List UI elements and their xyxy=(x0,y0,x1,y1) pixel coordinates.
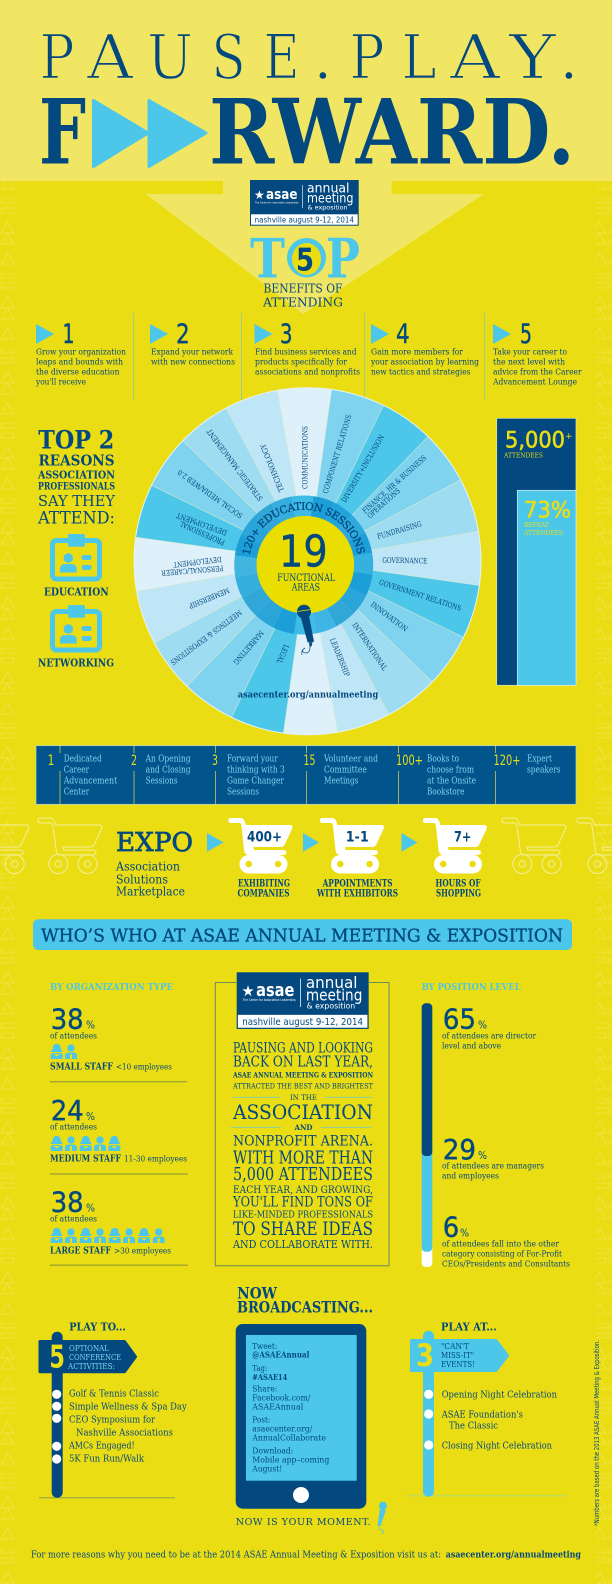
phone text: Tag: xyxy=(252,1364,267,1374)
fact 5: Books to xyxy=(427,755,459,765)
wheel inner ring xyxy=(234,495,373,635)
panel: attendees bars xyxy=(497,418,576,685)
icon: education badge xyxy=(52,534,100,579)
panel: now broadcasting: BROADCASTING... xyxy=(237,1298,373,1317)
title: pause play: . xyxy=(559,20,579,94)
icon: cart 400+: 400+ xyxy=(247,830,282,846)
events list xyxy=(441,1390,557,1452)
wheel labels: LEGAL xyxy=(275,643,291,665)
narrative text: WITH MORE THAN xyxy=(233,1149,373,1169)
banner: who's who xyxy=(33,919,572,950)
stat: large staff: >30 employees xyxy=(114,1246,171,1256)
bar: position levels xyxy=(422,1003,432,1267)
stat: small staff: % xyxy=(86,1018,95,1031)
narrative text xyxy=(232,1041,374,1251)
panel: expo heading: Association xyxy=(115,860,180,874)
stat: 29% xyxy=(442,1133,544,1181)
panel: expo heading: Solutions xyxy=(116,873,168,887)
wheel labels: PERSONAL/CAREER xyxy=(161,564,224,578)
fact 3: Forward your xyxy=(227,755,278,765)
panel: benefit 5 xyxy=(492,319,582,387)
stat: medium staff: 24 xyxy=(51,1094,84,1127)
panel: play to: PLAY TO... xyxy=(69,1320,126,1334)
wheel labels: DEVELOPMENT xyxy=(175,511,228,537)
fact 6: speakers xyxy=(527,766,561,776)
stat: 6%: of attendees fall into the other xyxy=(442,1240,560,1250)
footnote: *Numbers are based on the 2013 ASAE Annual Meeting & Exposition. xyxy=(593,1340,601,1526)
phone text: AnnualCollaborate xyxy=(251,1434,326,1444)
fact 2 xyxy=(131,753,191,787)
stat: medium staff: 11-30 employees xyxy=(124,1155,187,1165)
bullets xyxy=(52,1390,61,1464)
panel: attendees bars: + xyxy=(565,432,573,442)
subheading: benefits of attending: BENEFITS OF xyxy=(264,282,342,296)
stat: 29%: and employees xyxy=(442,1171,499,1181)
stat: small staff xyxy=(50,1002,172,1073)
panel: top 2 reasons xyxy=(37,425,116,670)
logo: asae annual meeting: meeting xyxy=(307,192,354,207)
fact 2: An Opening xyxy=(145,755,191,765)
panel: by organization type xyxy=(50,982,188,1266)
narrative text: EACH YEAR, AND GROWING, xyxy=(233,1185,373,1196)
panel: play to: ACTIVITIES: xyxy=(67,1362,115,1371)
panel: benefit 4 xyxy=(370,319,479,377)
panel: top 2 reasons: TOP 2 xyxy=(38,425,114,454)
stat: 65%: % xyxy=(478,1018,487,1031)
panel: expo heading xyxy=(115,828,193,899)
fact 6: 120+ xyxy=(494,753,520,769)
stat: 29%: % xyxy=(478,1149,487,1162)
panel: by position level xyxy=(422,982,570,1270)
stat: large staff: LARGE STAFF xyxy=(50,1246,112,1256)
center circle xyxy=(256,516,354,614)
title: forward xyxy=(39,80,575,186)
panel: attendees bars: ATTENDEES xyxy=(523,529,563,537)
icon: fast forward arrows xyxy=(94,100,206,166)
stat: 6%: % xyxy=(460,1227,469,1240)
stat: 65% xyxy=(442,1002,537,1051)
arrow xyxy=(303,833,319,852)
panel: attendees bars: 5,000 xyxy=(505,429,565,454)
phone xyxy=(236,1324,366,1509)
panel: facts bar xyxy=(36,746,576,804)
logo: asae annual meeting: meeting xyxy=(306,985,362,1004)
panel: top 2 reasons: SAY THEY xyxy=(38,492,116,510)
panel: play at: 3 xyxy=(416,1338,434,1374)
down arrow xyxy=(146,181,484,314)
wheel labels: GOVERNANCE xyxy=(382,556,427,565)
fact 1: 1 xyxy=(48,753,54,769)
title: pause play: P xyxy=(350,20,384,94)
icon: microphone xyxy=(378,1502,387,1534)
title: pause play xyxy=(40,20,579,94)
wheel labels: FUNDRAISING xyxy=(376,519,423,541)
icon: cart 400+ xyxy=(228,818,292,874)
panel: benefit 1: 1 xyxy=(62,319,74,350)
logo: asae annual meeting: & exposition xyxy=(307,1002,355,1011)
panel: play to: CONFERENCE xyxy=(69,1353,121,1362)
title: pause play: A xyxy=(449,20,501,94)
fact 2: Sessions xyxy=(146,777,178,787)
phone text: Mobile app–coming xyxy=(252,1456,330,1466)
wheel labels: DEVELOPMENT xyxy=(173,555,222,569)
fact 6 xyxy=(494,753,561,776)
stat: 65%: 65 xyxy=(443,1002,476,1035)
panel: now broadcasting xyxy=(236,1283,387,1534)
activities list: 5K Fun Run/Walk xyxy=(69,1454,144,1465)
title: pause play: S xyxy=(212,20,246,94)
phone text: ASAEAnnual xyxy=(251,1403,304,1413)
banner: who's who: WHO’S WHO AT ASAE ANNUAL MEETING & EXPOSITION xyxy=(41,926,563,947)
stat: small staff: <10 employees xyxy=(116,1063,172,1073)
icon: cart 7+ xyxy=(423,818,487,874)
panel: play at: PLAY AT... xyxy=(441,1320,497,1334)
cart caption: HOURS OF xyxy=(436,878,481,890)
wheel labels: OPERATIONS xyxy=(365,486,402,520)
chart: functional areas wheel xyxy=(134,387,482,736)
cart caption: SHOPPING xyxy=(436,888,481,900)
wheel labels: STRATEGIC MANAGEMENT xyxy=(205,427,265,503)
phone text: asaecenter.org/ xyxy=(252,1425,312,1435)
ring label: 120+ EDUCATION SESSIONS xyxy=(242,502,365,554)
title: pause play: U xyxy=(147,20,193,94)
signpost xyxy=(423,1331,434,1497)
events list: The Classic xyxy=(449,1420,498,1431)
activities list: Golf & Tennis Classic xyxy=(69,1389,159,1400)
panel: benefit 3: products specifically for xyxy=(255,357,348,367)
wheel labels: MEETINGS & EXPOSITIONS xyxy=(169,608,244,667)
panel: benefit 5: Take your career to xyxy=(493,347,567,357)
panel: top 2 reasons: ASSOCIATION xyxy=(37,468,115,481)
panel: top 2 reasons: EDUCATION xyxy=(44,586,109,599)
narrative text: TO SHARE IDEAS xyxy=(233,1219,373,1240)
panel: benefit 5: Advancement Lounge xyxy=(492,377,577,387)
phone text: Download: xyxy=(252,1447,293,1457)
activities list: Simple Wellness & Spa Day xyxy=(69,1402,187,1413)
panel: benefit 2: 2 xyxy=(176,319,190,350)
events list: ASAE Foundation's xyxy=(441,1410,523,1421)
panel: benefit 5: advice from the Career xyxy=(493,367,582,377)
phone text: Share: xyxy=(252,1385,277,1395)
title: pause play: E xyxy=(264,20,300,94)
heading: BY POSITION LEVEL xyxy=(422,982,521,993)
fact 3: Sessions xyxy=(227,788,259,798)
cart caption: WITH EXHIBITORS xyxy=(316,888,398,900)
fact 1: Advancement xyxy=(63,777,118,787)
events list: Opening Night Celebration xyxy=(442,1390,557,1401)
panel: benefit 3 xyxy=(254,319,360,377)
title: pause play: A xyxy=(86,20,134,94)
logo: asae annual meeting: asae xyxy=(256,981,294,1001)
panel: benefit 4: Gain more members for xyxy=(371,347,464,357)
cart caption: COMPANIES xyxy=(238,888,290,900)
panel: play to: OPTIONAL xyxy=(69,1344,110,1353)
logo: asae annual meeting: asae xyxy=(266,187,298,203)
panel: benefit 2: Expand your network xyxy=(151,347,234,357)
logo: asae annual meeting: & exposition xyxy=(308,203,348,211)
stat: medium staff: MEDIUM STAFF xyxy=(50,1155,122,1165)
panel: benefit 2 xyxy=(150,319,235,367)
narrative text: ASSOCIATION xyxy=(232,1100,373,1124)
panel: play at xyxy=(407,1320,567,1497)
fact 5 xyxy=(396,753,476,798)
panel: expo heading: EXPO xyxy=(116,828,193,858)
phone text: Facebook.com/ xyxy=(252,1394,310,1404)
panel: benefit 1: the diverse education xyxy=(36,367,120,377)
wheel labels: COMMUNICATIONS xyxy=(301,426,310,489)
events list: Closing Night Celebration xyxy=(442,1441,552,1452)
fact 4: 15 xyxy=(304,753,316,769)
subheading: benefits of attending: ATTENDING xyxy=(262,296,343,310)
arrow xyxy=(402,833,418,852)
fact 6: Expert xyxy=(527,755,552,765)
logo: asae annual meeting: annual xyxy=(307,182,350,197)
icon: cart 1-1: 1-1 xyxy=(346,830,369,846)
icon: networking badge xyxy=(52,605,100,650)
logo: asae annual meeting xyxy=(237,972,369,1029)
heading: top 5: T xyxy=(250,227,285,291)
stat: large staff xyxy=(50,1186,171,1256)
panel: attendees bars: ATTENDEES xyxy=(503,452,543,460)
narrative text: NONPROFIT ARENA. xyxy=(233,1134,373,1150)
wheel labels: PROFESSIONAL xyxy=(178,519,226,547)
phone text: August! xyxy=(251,1465,282,1475)
cart caption xyxy=(316,878,398,900)
wheel labels: SOCIAL MEDIA/WEB 2.0 xyxy=(176,468,244,520)
narrative text: ASAE ANNUAL MEETING & EXPOSITION xyxy=(232,1071,374,1080)
stat: 6% xyxy=(442,1211,570,1270)
logo: asae annual meeting: annual xyxy=(306,973,357,992)
narrative text: AND xyxy=(294,1123,313,1132)
activities list xyxy=(68,1389,187,1465)
logo: asae annual meeting: ★ xyxy=(254,188,265,202)
panel: attendees bars: 73% xyxy=(524,499,571,524)
panel: play to: 5 xyxy=(49,1339,65,1375)
phone text: @ASAEAnnual xyxy=(252,1351,310,1361)
cart caption: APPOINTMENTS xyxy=(322,878,393,890)
narrative text: AND COLLABORATE WITH. xyxy=(232,1237,373,1251)
footer: For more reasons why you need to be at the 2014 ASAE Annual Meeting & Exposition visit us at: xyxy=(31,1550,441,1561)
stat: medium staff: % xyxy=(86,1110,95,1123)
fact 2: and Closing xyxy=(146,766,191,776)
wheel labels xyxy=(161,414,462,678)
fact 5: Bookstore xyxy=(427,788,464,798)
cart caption xyxy=(436,878,481,900)
phone text: Post: xyxy=(252,1416,270,1426)
fact 5: 100+ xyxy=(396,753,423,769)
fact 5: choose from xyxy=(427,766,475,776)
wheel labels: INNOVATION xyxy=(369,600,410,634)
fact 3: 3 xyxy=(212,753,218,769)
center number: 19 xyxy=(279,527,328,578)
panel: benefit 1: Grow your organization xyxy=(36,347,126,357)
wheel labels: LEADERSHIP xyxy=(328,637,352,678)
panel: play at: "CAN'T xyxy=(441,1342,470,1351)
heading: top 5: 5 xyxy=(296,243,314,279)
wheel url: asaecenter.org/annualmeeting xyxy=(238,690,379,701)
activities list: CEO Symposium for xyxy=(69,1415,155,1426)
fact 1: Career xyxy=(64,766,90,776)
logo: asae annual meeting: nashville august 9-12, 2014 xyxy=(242,1017,363,1028)
cart caption xyxy=(238,878,290,900)
stat: 29%: 29 xyxy=(443,1133,476,1166)
wheel labels: TECHNOLOGY xyxy=(258,442,286,493)
panel: top 2 reasons: PROFESSIONALS xyxy=(38,482,115,493)
stat: large staff: 38 xyxy=(51,1186,84,1219)
fact 3 xyxy=(212,753,285,798)
panel: benefit 3: 3 xyxy=(280,319,292,350)
fact 3: Game Changer xyxy=(227,777,285,787)
logo: asae annual meeting: ★ xyxy=(242,983,255,1000)
panel: benefit 4: 4 xyxy=(396,319,410,350)
center caption: FUNCTIONAL xyxy=(277,573,335,584)
cart caption: EXHIBITING xyxy=(238,878,290,890)
fact 1: Dedicated xyxy=(64,755,102,765)
stat: 65%: of attendees are director xyxy=(442,1031,537,1041)
icon: cart 1-1 xyxy=(320,818,384,874)
bullets xyxy=(424,1390,433,1450)
fact 5: at the Onsite xyxy=(427,777,476,787)
narrative text: IN THE xyxy=(290,1093,317,1102)
heading: top 5 xyxy=(250,227,360,291)
signpost xyxy=(52,1332,63,1498)
heading: top 5: P xyxy=(326,227,360,291)
icon: microphone xyxy=(297,605,314,655)
title: pause play: L xyxy=(402,20,436,94)
panel: play to xyxy=(39,1320,187,1498)
fact 4: Meetings xyxy=(324,777,359,787)
panel: play at: MISS-IT" xyxy=(441,1351,474,1360)
fact 2: 2 xyxy=(131,753,137,769)
fact 1: Center xyxy=(64,788,90,798)
logo: asae annual meeting: nashville august 9-12, 2014 xyxy=(255,216,354,225)
narrative text: ATTRACTED THE BEST AND BRIGHTEST xyxy=(232,1081,373,1090)
panel: benefit 5: the next level with xyxy=(493,357,565,367)
wheel labels: INTERNATIONAL xyxy=(350,621,389,672)
stat: small staff: 38 xyxy=(51,1002,84,1035)
panel: benefit 5: 5 xyxy=(520,319,532,350)
logo: asae annual meeting xyxy=(250,180,359,226)
panel: top 2 reasons: ATTEND: xyxy=(37,509,115,528)
stat: medium staff xyxy=(50,1094,187,1165)
fact 4: Volunteer and xyxy=(323,755,378,765)
tagline: NOW IS YOUR MOMENT. xyxy=(236,1517,371,1528)
wheel labels: FINANCE, HR & BUSINESS xyxy=(360,453,428,515)
panel: expo heading: Marketplace xyxy=(116,885,185,899)
center caption xyxy=(277,573,335,594)
panel: benefit 1 xyxy=(35,319,126,387)
title: pause play: Y xyxy=(508,20,557,94)
logo: asae annual meeting: The Center for Association Leadership xyxy=(255,200,299,204)
panel: top 2 reasons: REASONS xyxy=(38,452,114,470)
panel: benefit 4: your association by learning xyxy=(370,357,479,367)
wheel labels: GOVERNMENT RELATIONS xyxy=(378,578,462,613)
narrative text: 5,000 ATTENDEES xyxy=(233,1164,373,1185)
logo: asae annual meeting: The Center for Association Leadership xyxy=(242,998,296,1002)
stat: small staff: of attendees xyxy=(50,1031,97,1041)
stat: 29%: of attendees are managers xyxy=(442,1161,544,1171)
panel: benefit 2: with new connections xyxy=(151,357,235,367)
top band xyxy=(0,0,612,181)
narrative text: LIKE-MINDED PROFESSIONALS xyxy=(233,1210,373,1221)
heading: BY ORGANIZATION TYPE xyxy=(50,982,173,993)
title: pause play: . xyxy=(313,20,333,94)
narrative text: YOU'LL FIND TONS OF xyxy=(232,1195,373,1211)
title: pause play: P xyxy=(40,20,74,94)
phone text: Tweet: xyxy=(252,1342,277,1352)
panel: play at: EVENTS! xyxy=(441,1360,475,1369)
phone text xyxy=(251,1342,330,1475)
stat: 6%: category consisting of For-Profit xyxy=(442,1250,562,1260)
arrow xyxy=(207,833,224,852)
icon: cart 7+: 7+ xyxy=(454,830,472,846)
panel: benefit 1: you'll receive xyxy=(35,377,86,387)
narrative text: PAUSING AND LOOKING xyxy=(233,1041,373,1057)
title: forward: F xyxy=(39,80,86,186)
panel: top 2 reasons: NETWORKING xyxy=(38,657,114,670)
stat: 6%: CEOs/Presidents and Consultants xyxy=(442,1260,570,1270)
stat: 6%: 6 xyxy=(443,1211,459,1244)
subheading: benefits of attending xyxy=(262,282,343,310)
phone text: #ASAE14 xyxy=(252,1373,287,1383)
fact 1 xyxy=(48,753,118,798)
panel: now broadcasting: NOW xyxy=(237,1283,278,1302)
center caption: AREAS xyxy=(291,583,320,594)
stat: 65%: level and above xyxy=(442,1041,501,1051)
wheel labels: MEMBERSHIP xyxy=(187,586,231,610)
activities list: AMCs Engaged! xyxy=(68,1441,135,1452)
footer: asaecenter.org/annualmeeting xyxy=(446,1550,581,1561)
panel: benefit 4: new tactics and strategies xyxy=(371,367,470,377)
wheel labels: MARKETING xyxy=(231,629,266,666)
panel: center narrative xyxy=(215,972,389,1266)
activities list: Nashville Associations xyxy=(76,1428,173,1439)
stat: large staff: of attendees xyxy=(50,1215,97,1225)
panel: attendees bars: REPEAT xyxy=(524,521,550,529)
stat: large staff: % xyxy=(86,1202,95,1215)
panel: benefit 3: associations and nonprofits xyxy=(255,367,360,377)
fact 4: Committee xyxy=(324,766,367,776)
wheel labels: DIVERSITY+INCLUSION xyxy=(340,433,386,504)
stat: medium staff: of attendees xyxy=(50,1122,97,1132)
fact 4 xyxy=(304,753,378,787)
fact 3: thinking with 3 xyxy=(227,766,285,776)
panel: benefit 1: leaps and bounds with xyxy=(36,357,123,367)
wheel labels: COMPONENT RELATIONS xyxy=(321,414,353,495)
narrative text: BACK ON LAST YEAR, xyxy=(233,1053,373,1071)
panel: benefit 3: Find business services and xyxy=(255,347,357,357)
stat: small staff: SMALL STAFF xyxy=(50,1063,114,1073)
